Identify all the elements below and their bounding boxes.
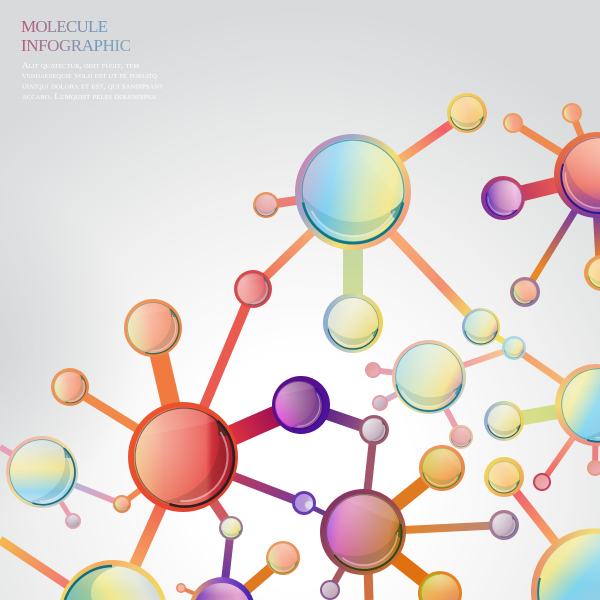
atom: upper right purple	[479, 173, 529, 223]
atom: orange top	[117, 292, 189, 364]
atom: bottom orange	[418, 571, 462, 600]
title: INFOGRAPHIC	[21, 36, 131, 55]
atom: small left	[253, 192, 279, 218]
atom: upper right small b	[562, 103, 582, 123]
atom: pink small lower	[372, 395, 388, 411]
atom: tiny orange	[113, 495, 131, 513]
atom: large purple orange	[314, 482, 415, 583]
title	[21, 17, 131, 55]
atom: pale mauve	[488, 509, 520, 541]
atom: bottom purple	[191, 577, 253, 600]
atom: small red	[231, 267, 275, 311]
atom: upper right yellow	[584, 255, 600, 291]
intro text block	[22, 60, 163, 101]
atom: bottom right large	[531, 528, 600, 600]
atom: small yellow bottom	[266, 541, 300, 575]
atom: tiny right	[587, 460, 600, 476]
intro text block: Alit quatectur, odit fugit, tem	[22, 60, 140, 70]
atom: tiny pale	[65, 513, 81, 529]
atom: top right small	[447, 93, 487, 133]
atom: large red	[116, 389, 252, 525]
atom: small blue	[502, 336, 526, 360]
atom: tiny bottom	[176, 583, 186, 593]
intro text block: accabo. Lumquist peles dolendipsa	[22, 91, 157, 101]
atom: lower pastel	[323, 293, 383, 353]
atom: upper right lower small	[509, 276, 541, 308]
atom: pale purple	[358, 414, 390, 446]
atom: pale blue middle	[392, 340, 466, 414]
atom: bottom left large	[60, 560, 166, 600]
atom: yellow pastel right	[484, 457, 524, 497]
intro text block: vendaesequie volo est ut pe poriatq	[22, 70, 158, 80]
atom: orange small left	[48, 365, 92, 409]
atom: large right cyan	[547, 354, 600, 456]
intro text block: uiatqui dolora et est, qui sandipsant	[22, 80, 163, 90]
atom: upper right small a	[503, 113, 523, 133]
atom: pale left	[0, 427, 87, 517]
atom: small mauve	[219, 516, 243, 540]
atom: large cyan	[295, 134, 411, 250]
atom: small violet	[292, 491, 316, 515]
atom: pastel right	[484, 401, 524, 441]
atom: pink small left	[365, 362, 381, 378]
atom: lower right pastel	[462, 308, 500, 346]
title: MOLECULE	[21, 17, 108, 36]
atom: pink small bottom	[449, 425, 473, 449]
atom: purple	[266, 372, 332, 438]
atom: small bottom mauve	[320, 580, 340, 600]
atom: tiny red	[533, 473, 551, 491]
atom: yellow green	[419, 445, 465, 491]
atom: upper right large	[547, 123, 600, 227]
